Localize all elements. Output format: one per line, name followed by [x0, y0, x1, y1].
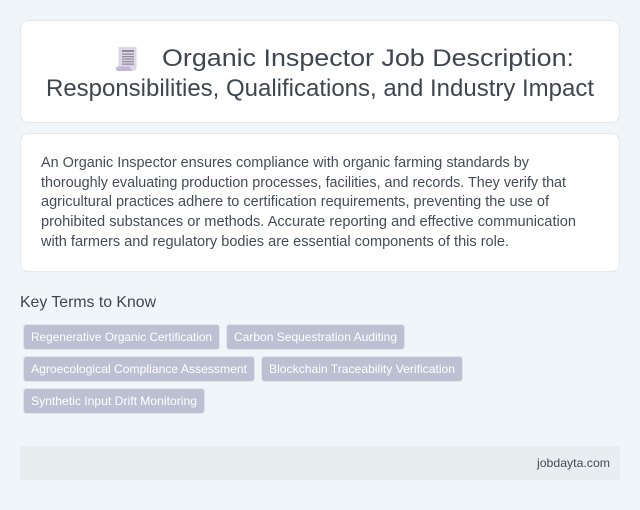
text block: description: prohibited substances or methods. Accurate reporting and effective communication: [41, 214, 576, 230]
tag: regenerative organic certification: Regenerative Organic Certification: [31, 330, 212, 344]
heading: title: Responsibilities, Qualifications, and Industry Impact: [46, 75, 594, 102]
tag: agroecological compliance assessment: Agroecological Compliance Assessment: [31, 362, 248, 376]
tag: blockchain traceability verification: Blockchain Traceability Verification: [269, 362, 455, 376]
text block: description: thoroughly evaluating production processes, facilities, and records. They verify that: [41, 175, 566, 191]
panel: description card: [20, 134, 620, 272]
text block: description: An Organic Inspector ensures compliance with organic farming standards by: [41, 155, 530, 171]
text block: description: [40, 155, 576, 250]
footer: jobdayta.com: [536, 456, 610, 470]
icon: document scroll: [116, 47, 136, 71]
text block: description: with farmers and regulatory bodies are essential components of this role.: [40, 234, 509, 250]
tag: agroecological compliance assessment: [24, 356, 254, 382]
heading: key terms: Key Terms to Know: [20, 294, 156, 311]
tag: synthetic input drift monitoring: Synthetic Input Drift Monitoring: [31, 394, 197, 408]
panel: title card: [20, 20, 620, 122]
footer: [20, 446, 620, 480]
tag: carbon sequestration auditing: [226, 324, 404, 350]
panel: key term tags: [24, 324, 462, 414]
heading: title: [46, 45, 594, 102]
tag: synthetic input drift monitoring: [24, 388, 204, 414]
heading: title: Organic Inspector Job Description:: [162, 45, 574, 72]
tag: blockchain traceability verification: [262, 356, 462, 382]
tag: carbon sequestration auditing: Carbon Sequestration Auditing: [234, 330, 397, 344]
tag: regenerative organic certification: [24, 324, 220, 350]
text block: description: agricultural practices adhere to certification requirements, preventing the use of: [41, 194, 550, 210]
